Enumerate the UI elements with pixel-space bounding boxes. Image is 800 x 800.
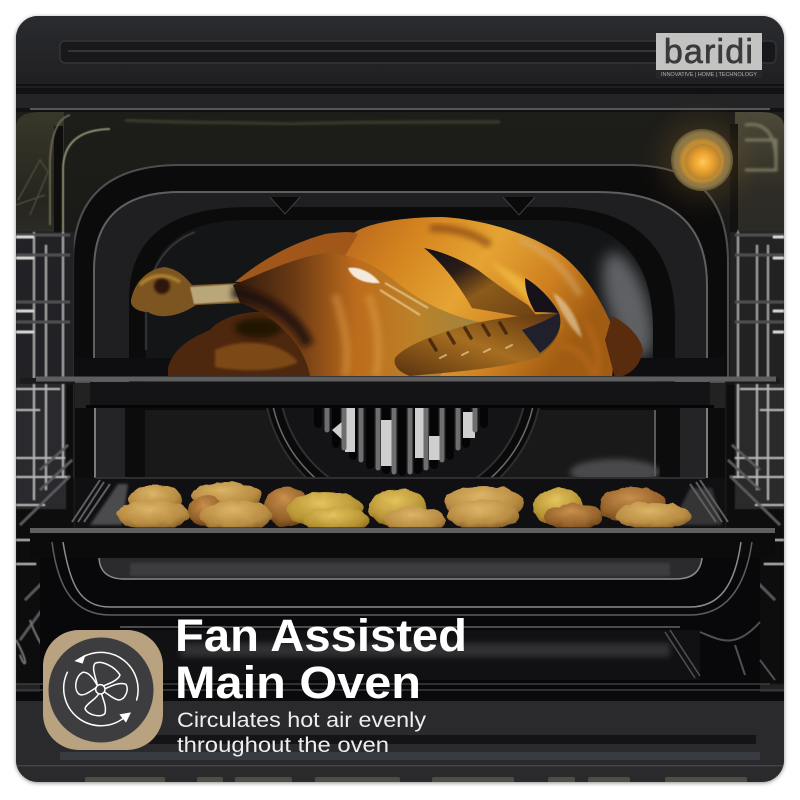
fan grille slots <box>318 408 484 472</box>
grille bars <box>327 408 475 472</box>
upper rack <box>20 358 780 408</box>
description text: Circulates hot air evenly <box>177 708 426 732</box>
description text <box>177 708 426 757</box>
title: Main Oven <box>175 657 421 708</box>
side rails right <box>730 232 784 382</box>
door seal band <box>16 88 784 114</box>
title <box>175 610 467 708</box>
icon: fan in rotating arrows <box>43 630 163 750</box>
title: Fan Assisted <box>175 610 467 661</box>
fan back panel <box>74 385 725 478</box>
inner arch recess <box>129 207 675 382</box>
left lower wall <box>16 384 75 684</box>
crust at rear <box>605 316 643 378</box>
oven lamp <box>662 120 742 200</box>
roast turkey <box>131 217 643 378</box>
fan blades behind grille <box>332 408 475 466</box>
upper wing <box>424 248 540 320</box>
turkey back body <box>330 217 616 378</box>
rear upper lobe <box>235 232 358 282</box>
wing claw <box>525 278 559 313</box>
top control strip <box>16 16 784 92</box>
thigh and breast <box>233 253 480 376</box>
description text: throughout the oven <box>177 733 389 757</box>
logo: baridi <box>664 33 754 71</box>
door base <box>16 701 784 783</box>
right lower wall <box>726 384 784 684</box>
cavity walls <box>16 112 784 382</box>
cavity floor <box>16 542 784 701</box>
outer arch band <box>73 165 728 382</box>
back wall behind turkey <box>146 197 664 382</box>
turkey lower leg <box>168 312 320 376</box>
wing tip <box>522 313 560 353</box>
logo: INNOVATIVE | HOME | TECHNOLOGY <box>661 72 757 78</box>
roast potatoes <box>117 482 691 533</box>
lower tray <box>30 478 775 558</box>
lower wing <box>395 313 561 376</box>
side rails left <box>16 232 74 382</box>
drumstick <box>131 267 243 316</box>
middle arch panel <box>94 192 707 382</box>
